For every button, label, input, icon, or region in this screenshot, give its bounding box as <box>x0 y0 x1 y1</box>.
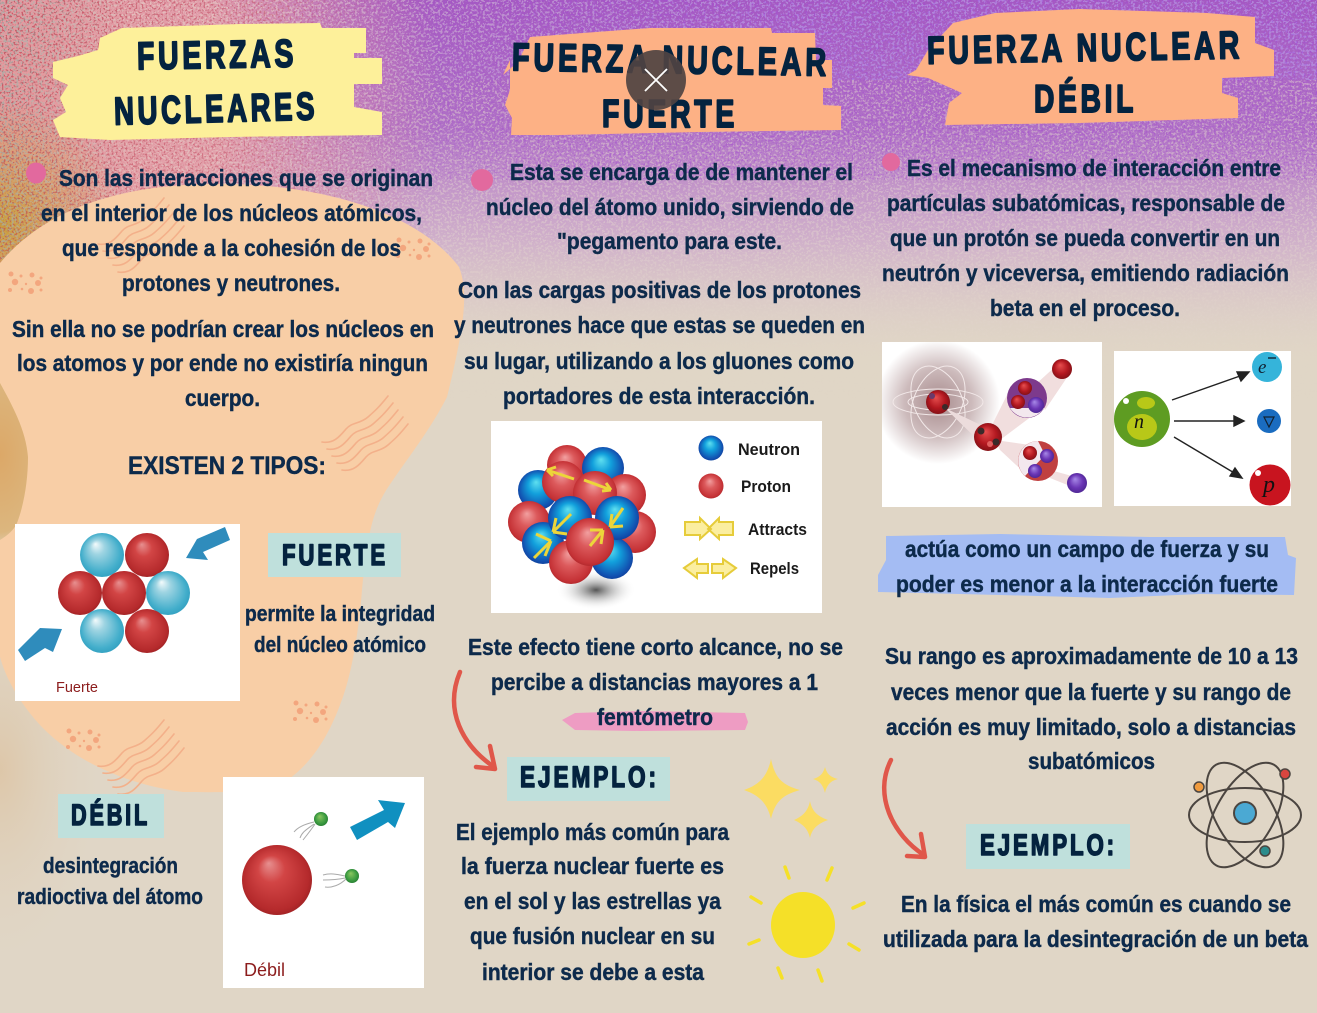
text: definition: protones y neutrones. <box>122 270 340 296</box>
tag: ejemplo <box>966 824 1130 869</box>
arrow: curved red <box>884 760 925 857</box>
text: example <box>456 819 730 985</box>
icon: sun <box>749 867 864 981</box>
tag: ejemplo: EJEMPLO: <box>980 829 1117 862</box>
text: field note: actúa como un campo de fuerza y su <box>905 536 1269 562</box>
text: range: Este efecto tiene corto alcance, no se <box>468 634 843 660</box>
text: fuerte description: permite la integridad <box>245 601 435 626</box>
peach organic blob <box>0 184 464 792</box>
text: description <box>882 155 1289 321</box>
title brush: fuerzas nucleares: NUCLEARES <box>114 85 319 134</box>
text: debil description: radioctiva del átomo <box>17 884 203 909</box>
panel: fuerza nuclear debil <box>876 9 1309 952</box>
image: debil nucleus <box>223 777 424 988</box>
image: fuerte nucleus <box>15 524 240 701</box>
tag: debil <box>58 794 164 838</box>
text: range: femtómetro <box>597 704 713 730</box>
text: description: Es el mecanismo de interacción entre <box>907 155 1281 181</box>
highlight: femtometro <box>562 711 748 731</box>
panel: fuerza nuclear fuerte <box>454 28 865 985</box>
icon: sparkles <box>744 759 838 838</box>
text: field note <box>896 536 1278 597</box>
text: field note: poder es menor a la interacción fuerte <box>896 571 1278 597</box>
text: definition: cuerpo. <box>185 385 260 411</box>
text: description: y neutrones hace que estas se queden en <box>454 312 865 338</box>
image: beta decay diagram: p <box>1261 472 1275 498</box>
title brush: fuerza nuclear fuerte <box>503 28 841 136</box>
title brush: fuerza nuclear debil <box>907 9 1274 125</box>
text: range: subatómicos <box>1028 748 1155 774</box>
image: beta decay diagram: n <box>1134 411 1144 433</box>
tag: ejemplo <box>507 757 670 801</box>
title brush: fuerza nuclear fuerte: FUERZA NUCLEAR <box>512 36 830 85</box>
image: beta decay diagram <box>1114 351 1291 506</box>
bullet <box>26 162 46 184</box>
text: example: interior se debe a esta <box>482 959 705 985</box>
title brush: fuerza nuclear debil: DÉBIL <box>1034 77 1137 121</box>
text: definition: Son las interacciones que se originan <box>59 165 433 191</box>
text: example: El ejemplo más común para <box>456 819 730 845</box>
text: description: Esta se encarga de de mantener el <box>510 159 853 185</box>
arrow: curved red <box>454 672 495 769</box>
title brush: fuerzas nucleares <box>53 23 382 140</box>
text: description: portadores de esta interacción. <box>503 383 815 409</box>
tag: fuerte <box>268 533 401 577</box>
image: atom decay <box>876 340 1102 507</box>
text: example: en el sol y las estrellas ya <box>464 888 722 914</box>
image: beta decay diagram: e <box>1258 357 1266 378</box>
image: nucleus diagram: Neutron <box>738 440 800 459</box>
image: nucleus diagram <box>491 421 822 613</box>
text: description <box>454 159 865 409</box>
text: fuerte description: del núcleo atómico <box>254 632 426 657</box>
title brush: fuerza nuclear fuerte: FUERTE <box>602 93 738 136</box>
text: description: su lugar, utilizando a los gluones como <box>464 348 854 374</box>
tag: ejemplo: EJEMPLO: <box>520 761 659 794</box>
panel: fuerzas nucleares <box>12 23 435 988</box>
image: nucleus diagram: Proton <box>741 477 791 496</box>
text: definition: los atomos y por ende no existiría ningun <box>17 350 428 376</box>
image: nucleus diagram: Attracts <box>748 520 807 539</box>
text: fuerte description <box>245 601 435 657</box>
text: definition: Sin ella no se podrían crear los núcleos en <box>12 316 434 342</box>
highlight: blue brush <box>878 534 1296 598</box>
image: fuerte nucleus: Fuerte <box>56 680 98 696</box>
text: description: "pegamento para este. <box>557 228 782 254</box>
tag: debil: DÉBIL <box>71 798 150 832</box>
heading: existen 2 tipos: EXISTEN 2 TIPOS: <box>128 452 326 480</box>
text: description: núcleo del átomo unido, sirviendo de <box>486 194 854 220</box>
text: range <box>885 643 1298 774</box>
bullet <box>471 169 493 191</box>
text: example: la fuerza nuclear fuerte es <box>461 853 724 879</box>
text: debil description <box>17 853 203 909</box>
text: definition: que responde a la cohesión de los <box>62 235 401 261</box>
bullet <box>882 153 900 171</box>
title brush: fuerzas nucleares: FUERZAS <box>137 33 297 78</box>
text: example: que fusión nuclear en su <box>470 923 715 949</box>
close button overlay <box>626 50 686 110</box>
text: definition <box>12 165 434 411</box>
text: description: Con las cargas positivas de los protones <box>458 277 861 303</box>
icon: atom <box>1189 750 1301 880</box>
text: description: beta en el proceso. <box>990 295 1180 321</box>
text: debil description: desintegración <box>43 853 178 878</box>
text: range <box>468 634 843 730</box>
image: nucleus diagram: Repels <box>750 559 799 578</box>
image: debil nucleus: Débil <box>244 960 285 980</box>
decorative waves and dots on blob <box>8 198 430 794</box>
text: range: percibe a distancias mayores a 1 <box>491 669 818 695</box>
tag: fuerte: FUERTE <box>282 539 388 572</box>
text: example <box>883 891 1309 952</box>
text: definition: en el interior de los núcleos atómicos, <box>41 200 422 226</box>
